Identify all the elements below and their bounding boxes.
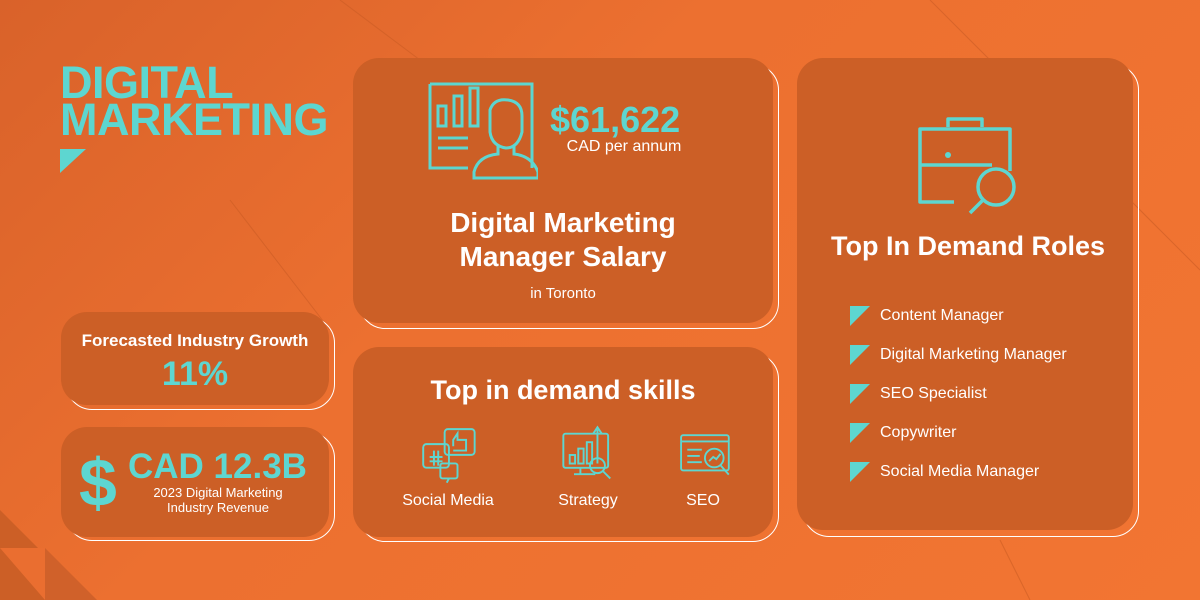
title: DIGITAL bbox=[60, 57, 233, 108]
title bbox=[60, 57, 328, 145]
icon: briefcase with magnifier bbox=[918, 117, 1016, 214]
icon: dollar sign: $ bbox=[79, 445, 117, 521]
skill: SEO: SEO bbox=[686, 492, 720, 509]
salary heading bbox=[450, 207, 676, 272]
salary heading: Manager Salary bbox=[460, 241, 666, 272]
salary location: in Toronto bbox=[530, 285, 596, 302]
panel: top skills bbox=[353, 347, 779, 542]
roles heading: Top In Demand Roles bbox=[831, 231, 1105, 261]
skill: SEO bbox=[680, 434, 730, 509]
icon: title triangle marker bbox=[60, 149, 86, 173]
roles list: SEO Specialist bbox=[880, 385, 987, 402]
skills heading: Top in demand skills bbox=[430, 375, 696, 405]
icon: manager presentation bbox=[428, 82, 538, 180]
growth value: 11% bbox=[162, 355, 228, 393]
panel: top roles bbox=[797, 58, 1139, 537]
roles list: Digital Marketing Manager bbox=[880, 346, 1067, 363]
revenue label: 2023 Digital Marketing Industry Revenue bbox=[153, 485, 283, 515]
skill: social media: Social Media bbox=[402, 492, 494, 509]
panel: industry growth bbox=[61, 312, 335, 410]
salary heading: Digital Marketing bbox=[450, 207, 676, 238]
roles list: Copywriter bbox=[880, 424, 956, 441]
revenue value: CAD 12.3B bbox=[128, 447, 307, 486]
icon: social media bbox=[422, 428, 476, 484]
roles list: Content Manager bbox=[880, 307, 1004, 324]
skill: strategy: Strategy bbox=[558, 492, 618, 509]
growth label: Forecasted Industry Growth bbox=[82, 331, 308, 350]
roles list bbox=[850, 306, 1067, 482]
salary unit: CAD per annum bbox=[567, 138, 681, 155]
icon: SEO bbox=[680, 434, 730, 476]
skill: social media bbox=[402, 428, 494, 509]
title: MARKETING bbox=[60, 94, 328, 145]
panel: industry revenue bbox=[61, 427, 335, 541]
salary value: $61,622 bbox=[550, 99, 680, 140]
icon: strategy bbox=[562, 426, 611, 480]
panel: salary bbox=[353, 58, 779, 329]
roles list: Social Media Manager bbox=[880, 463, 1039, 480]
skill: strategy bbox=[558, 426, 618, 509]
